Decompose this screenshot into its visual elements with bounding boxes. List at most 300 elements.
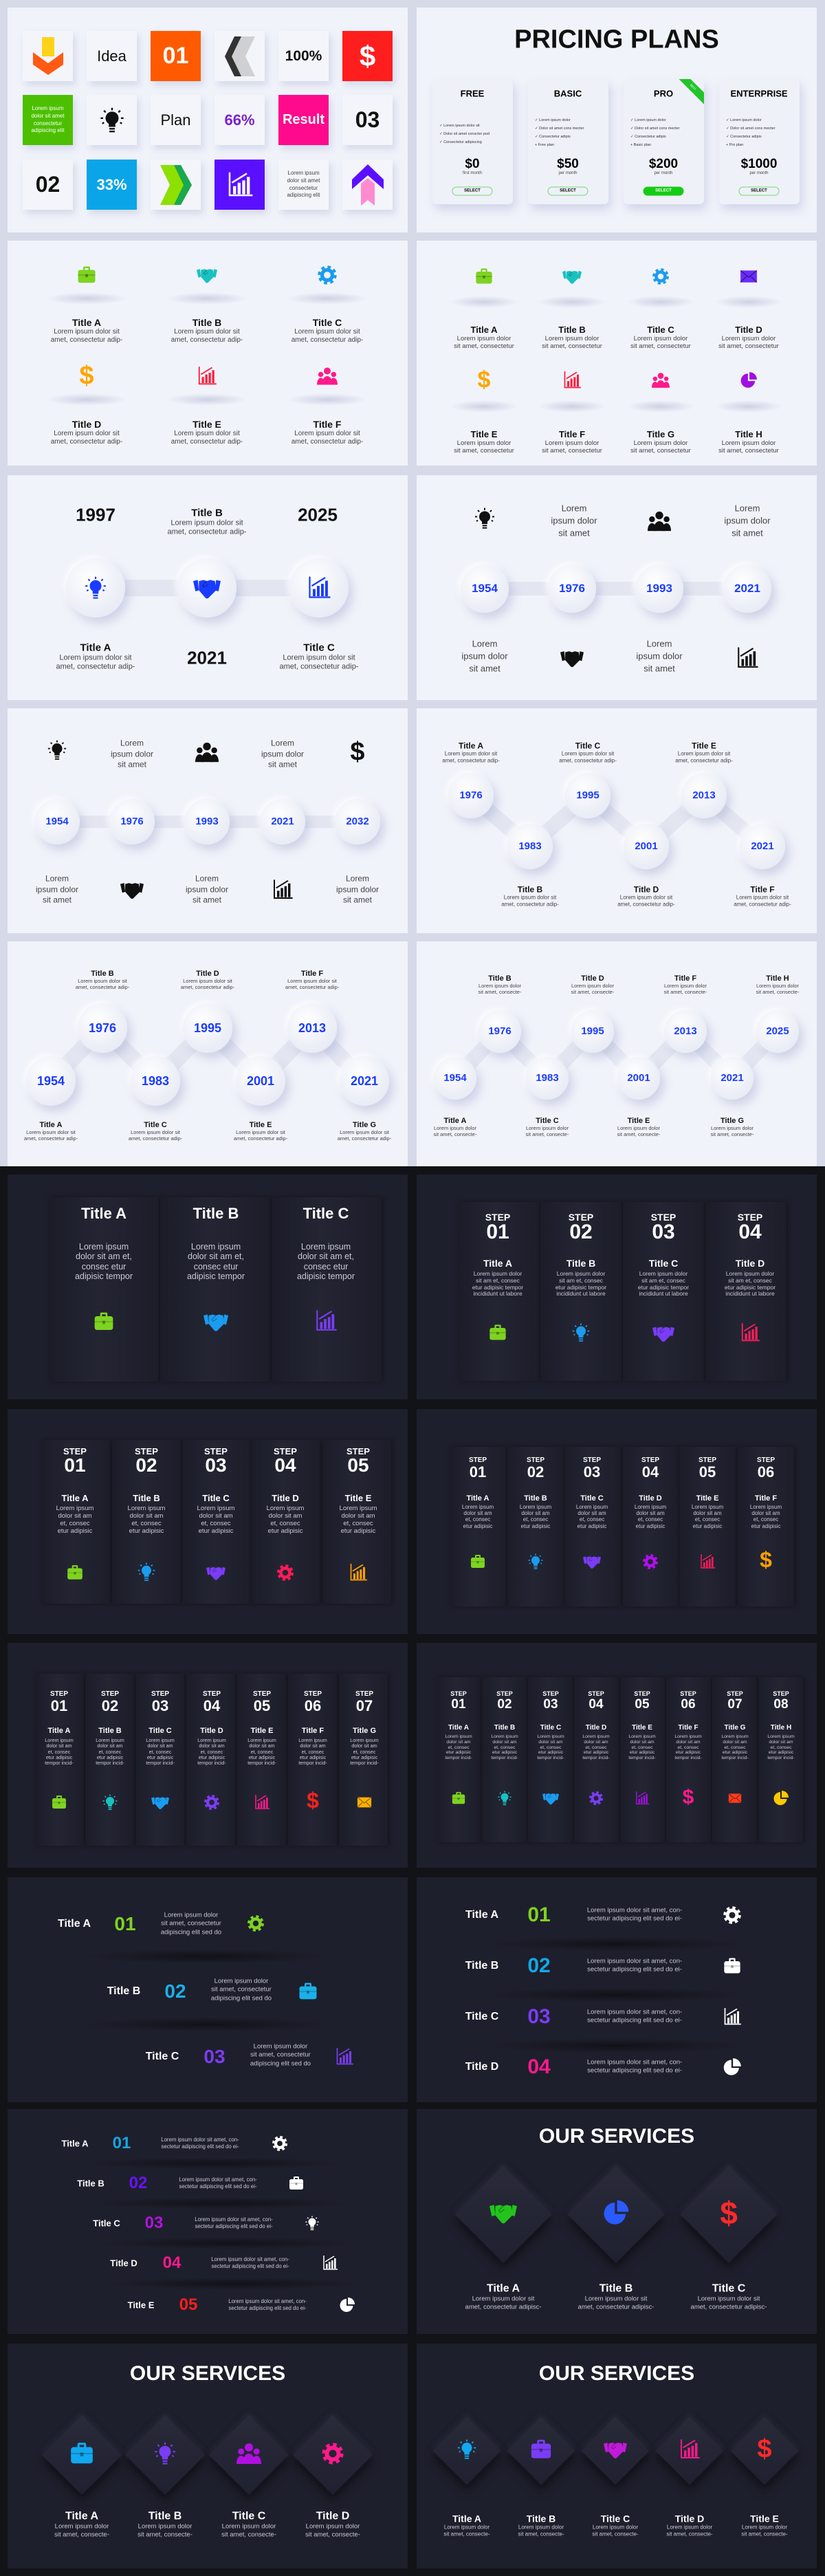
step 08: dolor sit am — [769, 1740, 793, 1745]
tile: 01 — [151, 31, 201, 81]
step 06: tempor incid- — [674, 1756, 702, 1760]
service C — [592, 2513, 639, 2538]
item A: sit amet, consectetur — [454, 342, 514, 351]
step 02 — [543, 1212, 619, 1371]
column A: adipisic tempor — [75, 1271, 133, 1281]
step 03: et, consec — [201, 1520, 231, 1527]
label D: Lorem ipsum dolor sit — [620, 894, 672, 900]
node 1983: 1983 — [142, 1074, 169, 1088]
label B: Lorem ipsum dolor sit — [78, 978, 127, 984]
step 06: STEP — [757, 1456, 775, 1464]
text bottom 1: Lorem — [45, 874, 69, 884]
icon: chart — [198, 367, 217, 385]
step 03: tempor incid- — [146, 1760, 175, 1766]
node 1993 — [184, 799, 230, 844]
step 07: et, consec — [725, 1745, 745, 1750]
service D: Lorem ipsum dolor — [306, 2523, 360, 2531]
step 04: 04 — [642, 1463, 659, 1481]
tile: 33% — [87, 160, 137, 210]
label D: Title D — [196, 970, 219, 978]
step 06: etur adipisic — [751, 1523, 780, 1529]
icon: dollar: $ — [757, 2434, 772, 2463]
icon: gear — [652, 268, 669, 285]
card: pro: per month — [654, 171, 673, 175]
item E: Title E — [471, 429, 497, 439]
item B — [171, 317, 243, 344]
label E: sit amet, consecte- — [617, 1131, 660, 1137]
label G: amet, consectetur adip- — [338, 1135, 391, 1142]
row C: Title C — [93, 2218, 120, 2228]
step 02: sit am et, consec — [559, 1277, 603, 1284]
item D: Lorem ipsum dolor sit — [54, 430, 120, 437]
node 2021 — [260, 799, 305, 844]
label D — [617, 884, 675, 908]
item B: Title B — [191, 507, 223, 519]
step 03: 03 — [584, 1463, 600, 1481]
label G: Title G — [720, 1117, 744, 1125]
node 2032: 2032 — [346, 816, 369, 827]
label C: Lorem ipsum dolor sit — [131, 1129, 180, 1135]
step 04: etur adipisic tempor — [725, 1284, 776, 1291]
text bottom 2: ipsum dolor — [186, 884, 228, 894]
step 02: 02 — [135, 1454, 157, 1476]
icon: pie — [741, 372, 757, 388]
node 1983 — [526, 1057, 569, 1100]
step 04: dolor sit am — [636, 1510, 665, 1516]
panel: dark seven steps — [8, 1643, 408, 1868]
item D: amet, consectetur adip- — [51, 438, 122, 446]
year 2021: 2021 — [187, 648, 227, 668]
step 06: dolor sit am — [300, 1743, 326, 1749]
step 02: tempor incid- — [96, 1760, 124, 1766]
step 02: et, consec — [523, 1516, 548, 1522]
text bottom 1: Lorem — [472, 639, 497, 649]
panel: dark staggered list three — [8, 1877, 408, 2102]
step 01: 01 — [51, 1697, 67, 1714]
row B: Lorem ipsum dolor sit amet, con- — [179, 2176, 257, 2183]
card: enterprise: ✓ Consectetur adipis — [726, 135, 762, 139]
card: pro: $200 — [649, 157, 678, 171]
column A: consec etur — [82, 1262, 126, 1271]
item A — [56, 642, 135, 671]
step 02: dolor sit am — [521, 1510, 550, 1516]
item B: Lorem ipsum dolor — [545, 335, 599, 342]
step 01: et, consec — [465, 1516, 490, 1522]
step 02: et, consec — [494, 1745, 515, 1750]
label E: Lorem ipsum dolor sit — [236, 1129, 285, 1135]
step 05 — [619, 1691, 665, 1829]
step 04: STEP — [588, 1690, 604, 1697]
tile: 01: 01 — [163, 43, 188, 69]
step 07: Title G — [353, 1727, 376, 1735]
step 01: etur adipisic — [463, 1523, 492, 1529]
step 04: Lorem ipsum — [635, 1504, 666, 1510]
row B: 02 — [527, 1954, 551, 1977]
label G: Title G — [353, 1121, 376, 1129]
card: free: ✓ Dolor sit amet conscter pod — [439, 132, 490, 136]
step 03: 03 — [205, 1454, 227, 1476]
step 02: STEP — [135, 1446, 158, 1456]
label C — [559, 741, 617, 764]
service E: Lorem ipsum dolor — [742, 2524, 787, 2531]
node 2021: 2021 — [751, 840, 774, 852]
step 06: Title F — [678, 1724, 698, 1732]
step 06: Title F — [302, 1727, 324, 1735]
step 01: dolor sit am — [58, 1512, 92, 1520]
icon: pie — [602, 2199, 630, 2227]
row C: sit amet, consectetur — [250, 2051, 311, 2059]
step 01: Lorem ipsum — [445, 1734, 472, 1739]
node 1993: 1993 — [195, 816, 219, 827]
label C: sit amet, consecte- — [526, 1131, 569, 1137]
step 04: 04 — [588, 1697, 604, 1712]
row B: sit amet, consectetur — [211, 1986, 272, 1994]
item A: amet, consectetur adip- — [51, 336, 122, 344]
text top 1: sit amet — [118, 760, 146, 769]
row A: sit amet, consectetur — [161, 1920, 221, 1928]
service C — [221, 2511, 276, 2540]
step 02: etur adipisic — [129, 1527, 164, 1535]
service B: amet, consectetur adipisc- — [578, 2304, 654, 2311]
step 01: dolor sit am — [46, 1743, 72, 1749]
label D: Lorem ipsum dolor — [571, 983, 614, 989]
step 05 — [325, 1447, 391, 1598]
tile: green text: adipiscing elit — [31, 127, 65, 133]
step 04: Lorem ipsum dolor — [726, 1270, 774, 1277]
column B: Lorem ipsum — [191, 1242, 241, 1252]
panel: pricing plans — [417, 8, 817, 232]
step 03: et, consec — [580, 1516, 604, 1522]
tile: bulb — [87, 95, 137, 145]
year 2025: 2025 — [298, 505, 338, 525]
service A: Title A — [65, 2511, 98, 2522]
icon: handshake — [488, 2199, 518, 2227]
step 02: 02 — [527, 1463, 544, 1481]
row B: Title B — [107, 1985, 140, 1997]
step 05: et, consec — [631, 1745, 652, 1750]
step 05: et, consec — [695, 1516, 720, 1522]
step 01: 01 — [470, 1463, 486, 1481]
step 06: etur adipisic — [676, 1750, 701, 1755]
row A: 01 — [527, 1903, 551, 1926]
text bottom 2 — [186, 874, 228, 906]
tile: green text — [23, 95, 73, 145]
label D: Title D — [634, 884, 659, 894]
node 1976 — [478, 1010, 521, 1053]
row B: 02 — [164, 1980, 186, 2002]
card: pro — [624, 79, 704, 204]
step 02: Title B — [566, 1258, 595, 1269]
row B — [472, 1949, 747, 1983]
text bottom 3: ipsum dolor — [336, 884, 379, 894]
step 04: 04 — [274, 1454, 296, 1476]
node 1976 — [448, 773, 494, 818]
item E: Lorem ipsum dolor sit — [174, 430, 240, 437]
label H: Title H — [766, 974, 789, 983]
label G: Lorem ipsum dolor sit — [340, 1129, 389, 1135]
step 02: Title B — [133, 1493, 160, 1503]
step 01 — [460, 1212, 536, 1371]
label E: Lorem ipsum dolor — [617, 1125, 660, 1131]
label A — [442, 741, 500, 764]
card: free: SELECT — [464, 188, 481, 193]
step 02: Lorem ipsum — [96, 1737, 124, 1743]
column C — [274, 1202, 377, 1367]
step 02: Lorem ipsum — [491, 1734, 518, 1739]
icon: bulb — [456, 2436, 477, 2463]
panel: three-node timeline — [8, 475, 408, 700]
column C: adipisic tempor — [297, 1271, 355, 1281]
label F: sit amet, consecte- — [664, 989, 707, 995]
service D: Lorem ipsum dolor — [667, 2524, 712, 2531]
node 2021 — [740, 824, 785, 869]
panel: our services four — [8, 2344, 408, 2568]
label F: Title F — [674, 974, 696, 983]
row D: sectetur adipiscing elit sed do ei- — [211, 2263, 289, 2269]
icon: briefcase — [476, 268, 492, 283]
tile: dollar: $ — [360, 40, 375, 72]
step 02 — [508, 1457, 563, 1595]
step 05: et, consec — [343, 1520, 373, 1527]
step 05: Title E — [251, 1727, 273, 1735]
step 04: etur adipisic — [636, 1523, 665, 1529]
step 07: dolor sit am — [723, 1740, 747, 1745]
label E — [617, 1117, 660, 1137]
step 03: incididunt ut labore — [639, 1290, 688, 1297]
label C: Lorem ipsum dolor — [526, 1125, 569, 1131]
icon: people — [648, 512, 671, 531]
node 2013 — [664, 1010, 707, 1053]
icon: handshake — [118, 878, 146, 902]
row C: 03 — [145, 2214, 163, 2232]
step 05: etur adipisic — [693, 1523, 722, 1529]
step 08: etur adipisic — [769, 1750, 793, 1755]
step 08 — [758, 1691, 804, 1829]
row E: 05 — [179, 2295, 197, 2314]
text top 2: sit amet — [732, 528, 763, 538]
step 02: etur adipisic — [521, 1523, 550, 1529]
tile: text: consectetur — [289, 184, 318, 191]
step 04: et, consec — [586, 1745, 606, 1750]
row B: sectetur adipiscing elit sed do ei- — [587, 1966, 682, 1974]
label E: Title E — [692, 741, 716, 750]
card: enterprise: $1000 — [741, 157, 777, 171]
node 2013: 2013 — [298, 1021, 326, 1035]
service A: amet, consectetur adipisc- — [465, 2304, 541, 2311]
tile: plan: Plan — [160, 111, 191, 128]
row D: Title D — [110, 2258, 138, 2268]
row A: adipiscing elit sed do — [161, 1928, 221, 1936]
tile: dollar — [342, 31, 393, 81]
node 1995: 1995 — [194, 1021, 221, 1035]
card: free: $0 — [465, 157, 480, 171]
step 03: Title C — [649, 1258, 678, 1269]
service C: Title C — [232, 2511, 265, 2522]
step 04: etur adipisic — [584, 1750, 608, 1755]
icon: briefcase — [78, 267, 95, 283]
panel: dark eight steps — [417, 1643, 817, 1868]
label D: sit amet, consecte- — [571, 989, 614, 995]
step 07 — [712, 1691, 758, 1829]
row C — [99, 2209, 319, 2237]
step 04: 04 — [738, 1221, 762, 1243]
title: PRICING PLANS — [514, 25, 719, 54]
step 02 — [85, 1691, 135, 1829]
node 1976 — [109, 799, 155, 844]
icon: people — [317, 367, 338, 385]
label E: amet, consectetur adip- — [675, 757, 733, 763]
row A: Title A — [58, 1918, 91, 1930]
step 08: et, consec — [770, 1745, 791, 1750]
row A — [67, 2130, 287, 2157]
step 04: Lorem ipsum — [267, 1505, 304, 1512]
row B: 02 — [129, 2174, 147, 2192]
step 04: STEP — [203, 1690, 221, 1698]
tile: text: dolor sit amet — [287, 177, 320, 184]
row C: 03 — [527, 2005, 551, 2028]
item C: amet, consectetur adip- — [292, 336, 363, 344]
item C — [630, 325, 691, 351]
label H: sit amet, consecte- — [756, 989, 799, 995]
step 04: Title D — [586, 1724, 606, 1732]
step 02: Lorem ipsum — [520, 1504, 551, 1510]
step 08: 08 — [773, 1697, 789, 1712]
row A: sectetur adipiscing elit sed do ei- — [587, 1915, 682, 1923]
item A — [454, 325, 514, 351]
text bottom 3: sit amet — [343, 895, 372, 905]
card: pro: SELECT — [655, 188, 672, 193]
step 01: STEP — [50, 1690, 68, 1698]
tile: result — [278, 95, 329, 145]
node 1995 — [565, 773, 610, 818]
text top 1: sit amet — [558, 528, 590, 538]
item F: Lorem ipsum dolor — [545, 439, 599, 447]
item B — [168, 507, 246, 536]
column A: Title A — [81, 1205, 126, 1222]
icon: bulb — [153, 2439, 177, 2468]
item C: Lorem ipsum dolor sit — [294, 328, 360, 336]
step 04: STEP — [641, 1456, 659, 1464]
card: pro: PRO — [654, 88, 673, 99]
card: free: ✓ Lorem ipsum dolor sit — [439, 124, 480, 128]
icon: handshake — [562, 271, 582, 284]
node 1993: 1993 — [646, 582, 672, 595]
item D: Title D — [735, 325, 762, 335]
card: enterprise: ENTERPRISE — [730, 88, 788, 99]
row C: 03 — [204, 2046, 226, 2067]
panel: dark five steps — [8, 1409, 408, 1634]
step 01: etur adipisic — [46, 1754, 72, 1760]
item D: Lorem ipsum dolor — [722, 335, 776, 342]
service A: Lorem ipsum dolor sit — [472, 2295, 534, 2303]
label A — [434, 1117, 476, 1137]
label B: Title B — [488, 974, 512, 983]
step 02: dolor sit am — [492, 1740, 517, 1745]
icon: bulb — [48, 740, 66, 760]
step 01: et, consec — [48, 1749, 70, 1755]
service C: Title C — [712, 2283, 745, 2295]
tile: text: Lorem ipsum — [287, 170, 320, 176]
service D: Title D — [675, 2513, 704, 2524]
item C — [292, 317, 363, 344]
service A — [465, 2283, 541, 2312]
icon: chart — [272, 879, 294, 901]
node: chart — [289, 558, 349, 618]
column B: consec etur — [194, 1262, 238, 1271]
card: pro: BEST — [690, 83, 697, 91]
step 05: dolor sit am — [341, 1512, 375, 1520]
step 04 — [187, 1691, 236, 1829]
step 04 — [623, 1457, 678, 1595]
step 04: et, consec — [201, 1749, 223, 1755]
icon: dollar: $ — [478, 367, 490, 393]
card: basic: ✓ Lorem ipsum dolor — [535, 118, 571, 122]
item A — [51, 317, 122, 344]
step 01: STEP — [469, 1456, 487, 1464]
panel: zigzag timeline seven — [8, 941, 408, 1166]
item G: Title G — [647, 429, 674, 439]
column B: Title B — [193, 1205, 239, 1222]
step 02: Title B — [98, 1727, 122, 1735]
icon: briefcase — [529, 2438, 553, 2461]
label D — [181, 970, 234, 990]
row D: Lorem ipsum dolor sit amet, con- — [211, 2256, 289, 2262]
panel: dark staggered list five — [8, 2109, 408, 2334]
step 05: dolor sit am — [249, 1743, 275, 1749]
step 01: etur adipisic tempor — [472, 1284, 523, 1291]
node 1983 — [131, 1056, 180, 1106]
column B: adipisic tempor — [187, 1271, 245, 1281]
step 05: Title E — [696, 1494, 718, 1503]
step 06: $ — [760, 1547, 772, 1572]
panel: zigzag timeline six — [417, 708, 817, 933]
step 03: tempor incid- — [537, 1756, 564, 1760]
label A: Lorem ipsum dolor sit — [26, 1129, 76, 1135]
service A: Lorem ipsum dolor — [55, 2523, 109, 2531]
step 03: etur adipisic tempor — [638, 1284, 689, 1291]
step 03: Lorem ipsum — [576, 1504, 608, 1510]
step 03: Title C — [540, 1724, 561, 1732]
item F: sit amet, consectetur — [542, 447, 602, 455]
label C: amet, consectetur adip- — [559, 757, 617, 763]
card: basic — [528, 79, 608, 204]
node 2021 — [711, 1057, 754, 1100]
item G: sit amet, consectetur — [630, 447, 691, 455]
text top 2: Lorem — [735, 503, 760, 514]
icon: people — [652, 373, 670, 388]
item A: Title A — [470, 325, 498, 335]
text bottom 3 — [336, 874, 379, 906]
tile: idea: Idea — [97, 47, 126, 65]
step 04: Lorem ipsum — [197, 1737, 226, 1743]
card: pro: ✓ Lorem ipsum dolor — [630, 118, 666, 122]
panel: eight icon features — [417, 241, 817, 466]
label B: sit amet, consecte- — [478, 989, 521, 995]
service C: Lorem ipsum dolor — [593, 2524, 638, 2531]
row B: Lorem ipsum dolor — [214, 1977, 268, 1985]
step 03: etur adipisic — [147, 1754, 173, 1760]
label E — [234, 1121, 287, 1142]
step 07: Lorem ipsum — [721, 1734, 749, 1739]
row C: Title C — [146, 2051, 179, 2062]
step 06: dolor sit am — [676, 1740, 701, 1745]
icon: gear — [321, 2442, 344, 2465]
row A — [472, 1898, 747, 1932]
panel: dark four steps — [417, 1175, 817, 1399]
card: enterprise: SELECT — [751, 188, 767, 193]
node 1976 — [78, 1003, 127, 1053]
label F — [734, 884, 791, 908]
